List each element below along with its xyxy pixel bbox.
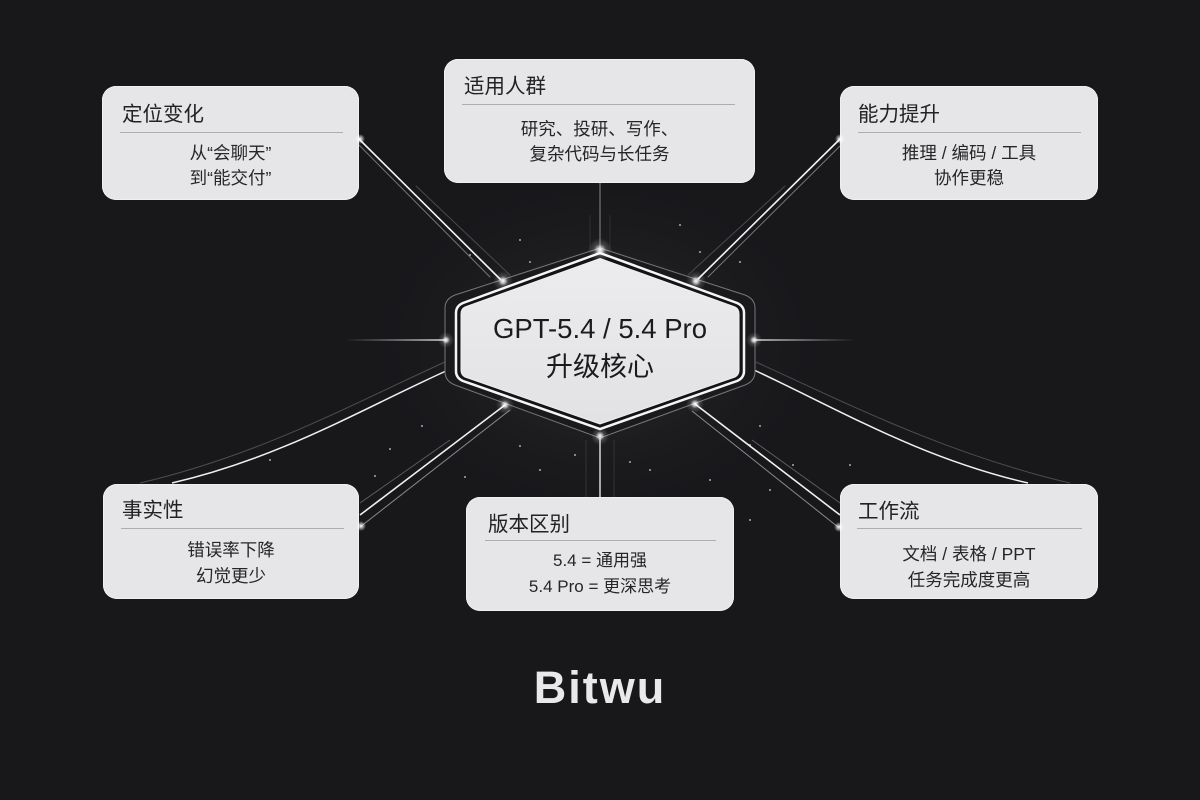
connector: left spur xyxy=(345,339,445,341)
panel: 适用人群: 研究、投研、写作、 xyxy=(521,119,678,139)
hexagon title: GPT-5.4 / 5.4 Pro xyxy=(493,313,707,344)
panel: 工作流: 工作流 xyxy=(858,500,920,523)
panel: 适用人群: 复杂代码与长任务 xyxy=(530,144,670,164)
panel: 版本区别 xyxy=(466,497,734,611)
panel: 定位变化: 到“能交付” xyxy=(190,168,271,188)
panel: 定位变化 xyxy=(102,86,359,200)
connector: straight lines to workflow card xyxy=(692,404,840,527)
connector: top-right card xyxy=(688,139,840,281)
panel: 工作流 xyxy=(840,484,1098,599)
panel: 适用人群: 适用人群 xyxy=(464,75,546,98)
connector: curved lines to workflow card xyxy=(754,362,1070,483)
connector: version card xyxy=(586,432,614,497)
light flares xyxy=(438,238,762,445)
connector: top card xyxy=(590,183,610,250)
panel: 能力提升 xyxy=(840,86,1098,200)
panel: 定位变化: 从“会聊天” xyxy=(190,143,271,163)
panel: 事实性: 事实性 xyxy=(122,499,184,522)
brand wordmark: Bitwu xyxy=(534,662,666,713)
connector: right spur xyxy=(755,339,856,341)
panel: 定位变化: 定位变化 xyxy=(122,103,204,126)
panel: 版本区别: 版本区别 xyxy=(488,513,570,536)
panel: 适用人群 xyxy=(444,59,755,183)
panel: 能力提升: 能力提升 xyxy=(858,103,940,126)
panel: 工作流: 任务完成度更高 xyxy=(908,570,1030,590)
connector: straight lines to fact card xyxy=(360,405,510,527)
panel: 版本区别: 5.4 = 通用强 xyxy=(553,551,647,570)
connector: curved lines to fact card xyxy=(140,362,446,483)
panel: 能力提升: 协作更稳 xyxy=(934,168,1004,188)
starfield haze xyxy=(269,165,851,525)
panel: 版本区别: 5.4 Pro = 更深思考 xyxy=(529,577,671,596)
panel: 事实性: 幻觉更少 xyxy=(196,566,266,586)
panel: 能力提升: 推理 / 编码 / 工具 xyxy=(902,143,1036,163)
connector: top-left card xyxy=(359,139,510,281)
panel: 工作流: 文档 / 表格 / PPT xyxy=(902,544,1036,564)
hexagon subtitle: 升级核心 xyxy=(546,352,654,382)
panel: 事实性: 错误率下降 xyxy=(187,540,275,560)
central hexagon xyxy=(445,248,755,438)
panel: 事实性 xyxy=(103,484,359,599)
